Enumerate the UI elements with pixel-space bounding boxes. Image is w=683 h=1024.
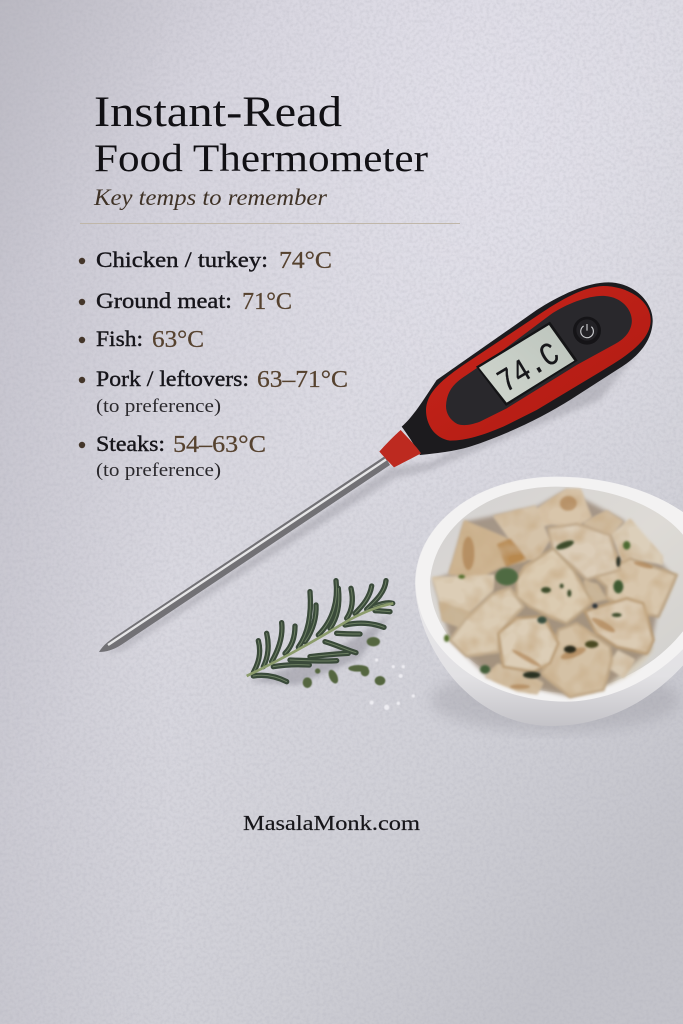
item: steaks: 54–63°C (173, 432, 266, 458)
bowl rim (416, 477, 683, 702)
item: chicken / turkey: 74°C (279, 248, 332, 274)
thermometer (99, 282, 653, 654)
item: chicken / turkey: Chicken / turkey: (96, 247, 268, 272)
loose herb flakes (303, 637, 385, 688)
bowl of chicken (415, 477, 683, 732)
item: steaks: Steaks: (96, 431, 165, 456)
red collar (379, 430, 421, 467)
cream sauce and shadow under chicken (450, 537, 653, 693)
item: steaks: (to preference) (96, 460, 221, 481)
bowl body (415, 477, 683, 726)
browned edges (462, 496, 654, 689)
rosemary sprig (247, 581, 415, 710)
title: Food Thermometer (94, 137, 428, 180)
probe (99, 456, 390, 652)
item: fish: 63°C (152, 327, 204, 353)
item: pork / leftovers: 63–71°C (257, 367, 348, 393)
item: ground meat (79, 288, 292, 315)
subtitle: Key temps to remember (93, 185, 328, 210)
herb flecks (444, 539, 630, 678)
item: pork / leftovers (79, 366, 348, 417)
item: pork / leftovers: Pork / leftovers: (96, 366, 249, 391)
title: Instant-Read (94, 89, 342, 136)
salt specks (370, 658, 415, 710)
handle (379, 282, 653, 467)
item: ground meat: 71°C (242, 289, 292, 315)
lcd screen: 74.C (491, 336, 566, 401)
bowl interior (430, 487, 683, 693)
website credit: MasalaMonk.com (243, 811, 420, 835)
temperature list (79, 247, 348, 481)
power button (573, 317, 601, 345)
item: fish (79, 326, 204, 353)
item: chicken / turkey (79, 247, 332, 274)
item: pork / leftovers: (to preference) (96, 396, 221, 417)
item: ground meat: Ground meat: (96, 288, 232, 313)
item: steaks (79, 431, 266, 481)
title (94, 89, 428, 180)
chicken pieces (433, 490, 677, 697)
item: fish: Fish: (96, 326, 143, 351)
